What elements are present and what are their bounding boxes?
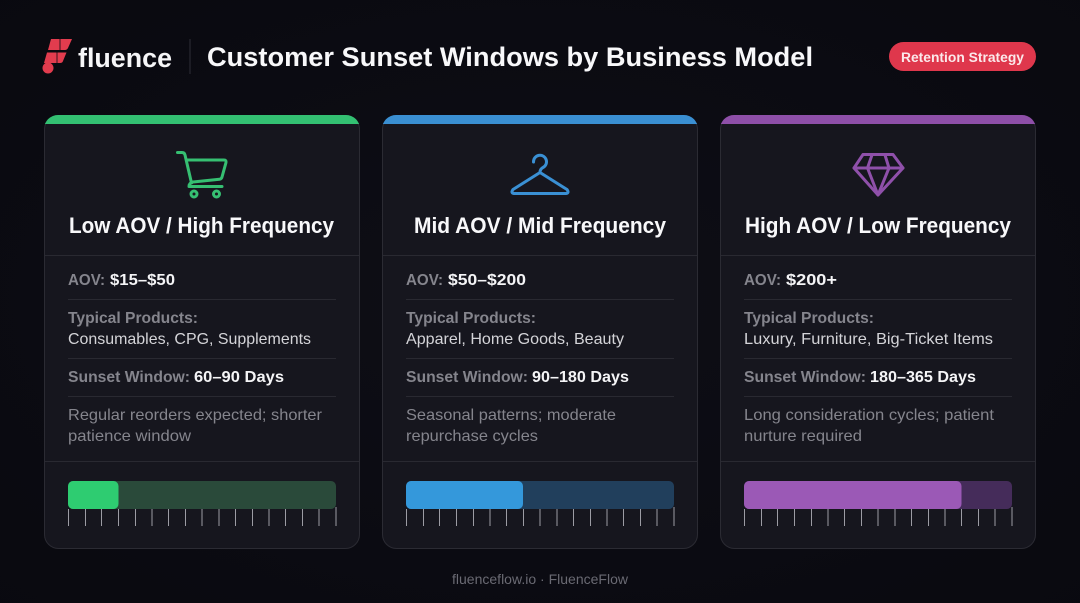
description: patience window bbox=[68, 428, 191, 445]
timeline bar bbox=[744, 481, 1012, 526]
description: nurture required bbox=[744, 428, 862, 445]
typical products bbox=[406, 310, 624, 348]
AOV row: $50–$200 bbox=[448, 272, 526, 289]
description: Long consideration cycles; patient bbox=[744, 407, 995, 424]
logo: fluence bbox=[42, 39, 172, 74]
typical products: Consumables, CPG, Supplements bbox=[68, 331, 311, 348]
sunset window bbox=[68, 369, 284, 386]
description: Seasonal patterns; moderate bbox=[406, 407, 616, 424]
description bbox=[406, 407, 616, 445]
sunset window: Sunset Window: bbox=[68, 369, 190, 386]
timeline bar bbox=[406, 481, 674, 526]
description: repurchase cycles bbox=[406, 428, 538, 445]
AOV row bbox=[744, 272, 837, 289]
typical products bbox=[68, 310, 311, 348]
sunset window: Sunset Window: bbox=[406, 369, 528, 386]
badge: retention strategy: Retention Strategy bbox=[901, 50, 1024, 65]
AOV row bbox=[68, 272, 175, 289]
sunset window: 90–180 Days bbox=[532, 369, 629, 386]
AOV row: AOV: bbox=[68, 272, 105, 289]
sunset window: 60–90 Days bbox=[194, 369, 284, 386]
timeline bar bbox=[68, 481, 336, 526]
typical products bbox=[744, 310, 993, 348]
footer: fluenceflow.io · FluenceFlow bbox=[452, 572, 628, 587]
title: Customer Sunset Windows by Business Model bbox=[207, 42, 813, 72]
typical products: Typical Products: bbox=[744, 310, 874, 327]
icon: diamond bbox=[854, 154, 903, 195]
AOV row: AOV: bbox=[406, 272, 443, 289]
typical products: Luxury, Furniture, Big-Ticket Items bbox=[744, 331, 993, 348]
heading: High AOV / Low Frequency bbox=[745, 213, 1012, 238]
AOV row: $200+ bbox=[786, 272, 837, 289]
typical products: Typical Products: bbox=[406, 310, 536, 327]
AOV row bbox=[406, 272, 526, 289]
panel: high AOV low frequency bbox=[720, 115, 1036, 548]
panel: low AOV high frequency bbox=[44, 115, 360, 548]
description: Regular reorders expected; shorter bbox=[68, 407, 323, 424]
sunset window bbox=[406, 369, 629, 386]
AOV row: $15–$50 bbox=[110, 272, 175, 289]
icon: shopping cart bbox=[178, 152, 226, 197]
typical products: Apparel, Home Goods, Beauty bbox=[406, 331, 624, 348]
typical products: Typical Products: bbox=[68, 310, 198, 327]
icon: fluence mark bbox=[42, 39, 72, 74]
description bbox=[68, 407, 323, 445]
icon: clothes hanger bbox=[512, 155, 568, 194]
description bbox=[744, 407, 995, 445]
wordmark: fluence bbox=[78, 43, 172, 73]
heading: Low AOV / High Frequency bbox=[69, 213, 335, 238]
panel: mid AOV mid frequency bbox=[382, 115, 698, 548]
badge: retention strategy bbox=[889, 42, 1036, 71]
sunset window: 180–365 Days bbox=[870, 369, 976, 386]
AOV row: AOV: bbox=[744, 272, 781, 289]
sunset window bbox=[744, 369, 976, 386]
heading: Mid AOV / Mid Frequency bbox=[414, 213, 667, 238]
sunset window: Sunset Window: bbox=[744, 369, 866, 386]
